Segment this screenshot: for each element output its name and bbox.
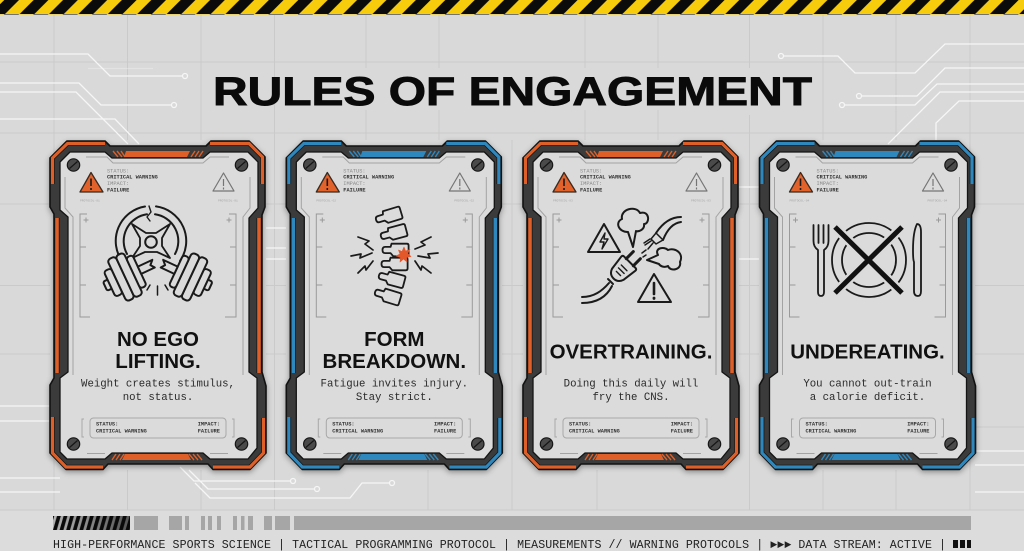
status header: FAILURE bbox=[107, 188, 129, 194]
status footer: FAILURE bbox=[907, 428, 930, 434]
heading bbox=[323, 328, 466, 373]
status header: STATUS: bbox=[816, 168, 839, 174]
icon: spine with fracture bbox=[351, 206, 438, 306]
heading bbox=[115, 328, 201, 373]
status header: PROTOCOL-03 bbox=[691, 200, 711, 202]
status header: IMPACT: bbox=[816, 181, 839, 187]
description bbox=[803, 378, 932, 404]
description: fry the CNS. bbox=[593, 392, 669, 404]
description: You cannot out-train bbox=[803, 378, 932, 390]
panel: form breakdown bbox=[286, 141, 502, 470]
panel: overtraining bbox=[523, 141, 739, 470]
status footer bbox=[569, 422, 693, 434]
status footer: CRITICAL WARNING bbox=[96, 428, 147, 434]
status header: FAILURE bbox=[816, 188, 839, 194]
icon: burnt plug bbox=[582, 209, 681, 303]
status header: STATUS: bbox=[343, 168, 366, 174]
status header: PROTOCOL-03 bbox=[553, 200, 573, 202]
status footer: IMPACT: bbox=[907, 422, 930, 428]
description: Fatigue invites injury. bbox=[321, 378, 468, 390]
status header bbox=[316, 168, 474, 202]
icon: cracked plate and broken dumbbell bbox=[95, 206, 220, 307]
description: Doing this daily will bbox=[564, 378, 698, 390]
heading: NO EGO bbox=[117, 328, 199, 351]
status footer: FAILURE bbox=[198, 428, 220, 434]
status footer: CRITICAL WARNING bbox=[332, 428, 383, 434]
status footer: FAILURE bbox=[434, 428, 456, 434]
status header: CRITICAL WARNING bbox=[816, 174, 867, 180]
status footer: STATUS: bbox=[806, 422, 828, 428]
status footer: FAILURE bbox=[671, 428, 693, 434]
description: a calorie deficit. bbox=[810, 392, 925, 404]
status footer: IMPACT: bbox=[434, 422, 456, 428]
status header: STATUS: bbox=[580, 168, 602, 174]
description: Weight creates stimulus, bbox=[81, 378, 235, 390]
status header: IMPACT: bbox=[107, 181, 129, 187]
status header: PROTOCOL-02 bbox=[454, 200, 474, 202]
status footer: CRITICAL WARNING bbox=[806, 428, 856, 434]
heading: FORM bbox=[364, 328, 424, 351]
description: Stay strict. bbox=[356, 392, 433, 404]
footer status blocks bbox=[953, 540, 971, 548]
description bbox=[564, 378, 698, 404]
status footer: CRITICAL WARNING bbox=[569, 428, 620, 434]
status header: CRITICAL WARNING bbox=[107, 174, 158, 180]
status header: PROTOCOL-02 bbox=[316, 200, 336, 202]
status footer bbox=[332, 422, 456, 434]
status header: PROTOCOL-04 bbox=[928, 200, 948, 202]
status header bbox=[80, 168, 238, 202]
footer background bbox=[0, 510, 1024, 551]
footer data bar bbox=[53, 516, 971, 530]
status footer: STATUS: bbox=[96, 422, 118, 428]
status header: FAILURE bbox=[343, 188, 366, 194]
status footer: STATUS: bbox=[332, 422, 355, 428]
status footer bbox=[806, 422, 930, 434]
hazard stripe bar bbox=[0, 0, 1024, 14]
panel: undereating bbox=[760, 141, 976, 470]
panel: no ego lifting bbox=[50, 141, 266, 470]
status footer: IMPACT: bbox=[198, 422, 220, 428]
status header: IMPACT: bbox=[343, 181, 366, 187]
description: not status. bbox=[123, 392, 193, 404]
heading: BREAKDOWN. bbox=[323, 350, 466, 373]
status header: CRITICAL WARNING bbox=[343, 174, 394, 180]
status header: PROTOCOL-01 bbox=[80, 200, 100, 202]
status footer: IMPACT: bbox=[671, 422, 693, 428]
description bbox=[81, 378, 235, 404]
status header: STATUS: bbox=[107, 168, 129, 174]
status header: IMPACT: bbox=[580, 181, 602, 187]
status footer bbox=[96, 422, 220, 434]
status header bbox=[553, 168, 711, 202]
status footer: STATUS: bbox=[569, 422, 591, 428]
status header: PROTOCOL-01 bbox=[218, 200, 238, 202]
status header: CRITICAL WARNING bbox=[580, 174, 631, 180]
icon: crossed-out plate and cutlery bbox=[814, 223, 921, 297]
status header: PROTOCOL-04 bbox=[790, 200, 810, 202]
status header: FAILURE bbox=[580, 188, 602, 194]
heading: LIFTING. bbox=[115, 350, 201, 373]
title: RULES OF ENGAGEMENT bbox=[213, 70, 812, 114]
heading: OVERTRAINING. bbox=[550, 340, 712, 364]
status header bbox=[790, 168, 948, 202]
description bbox=[321, 378, 468, 404]
heading: UNDEREATING. bbox=[790, 340, 945, 364]
